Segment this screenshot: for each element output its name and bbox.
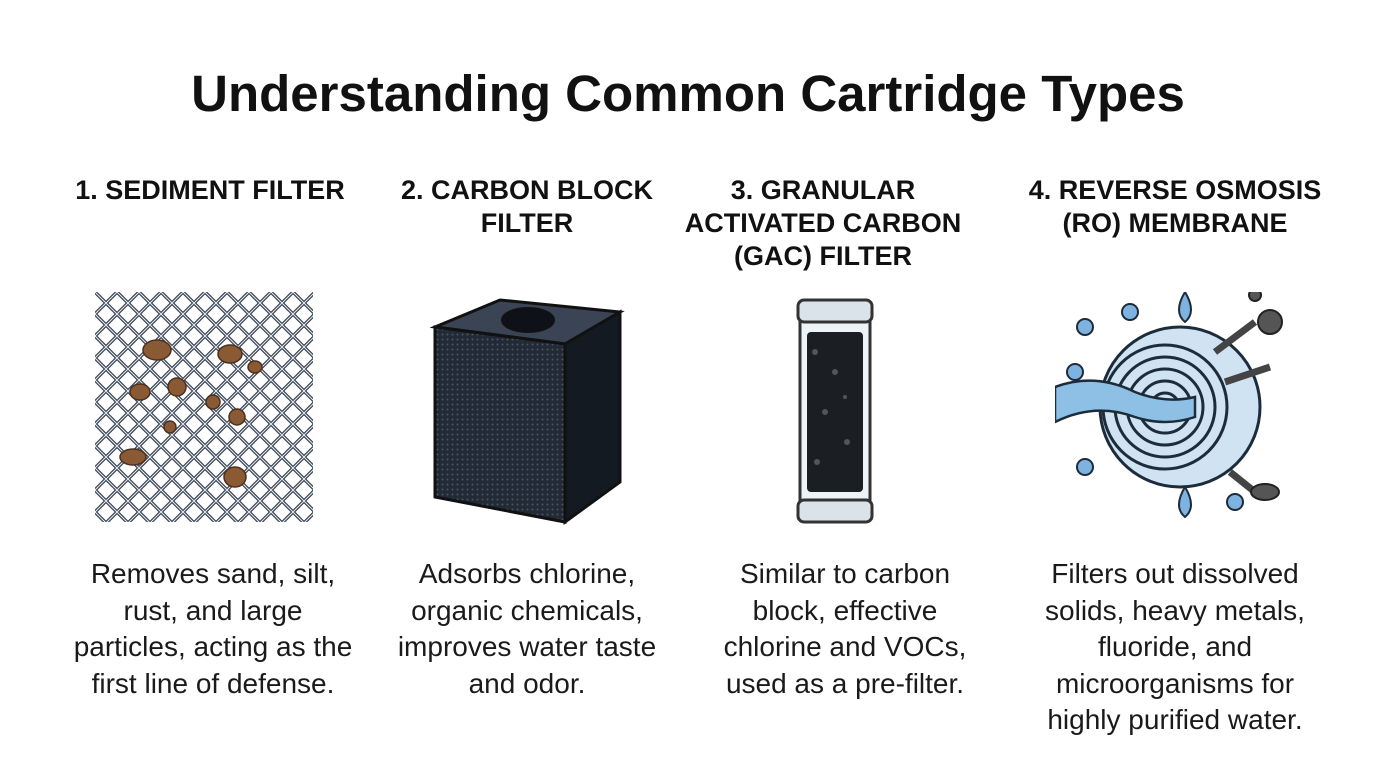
text: carbon block: improves water taste [398, 631, 656, 662]
text: GAC [724, 558, 966, 699]
text: sediment: rust, and large [124, 594, 302, 626]
text: GAC: Similar to carbon [740, 558, 950, 589]
text: GAC: block, effective [753, 594, 937, 626]
icon: sediment mesh [95, 292, 313, 522]
text: RO: fluoride, and [1098, 631, 1252, 662]
text: sediment: particles, acting as the [74, 631, 352, 662]
heading: RO: 4. REVERSE OSMOSIS [1029, 175, 1321, 205]
text: RO [1045, 558, 1305, 735]
heading: GAC: ACTIVATED CARBON [685, 208, 961, 238]
text: RO: Filters out dissolved [1051, 558, 1299, 589]
text: carbon block: Adsorbs chlorine, [419, 558, 635, 589]
heading: GAC [685, 175, 961, 271]
heading: RO: (RO) MEMBRANE [1062, 208, 1287, 238]
text: sediment: first line of defense. [92, 668, 334, 698]
heading: GAC: 3. GRANULAR [731, 175, 915, 205]
text: sediment [74, 558, 352, 698]
text: carbon block [398, 558, 656, 698]
icon: RO membrane [1055, 292, 1283, 518]
text: RO: solids, heavy metals, [1045, 594, 1305, 626]
icon: GAC cartridge [796, 298, 874, 524]
heading: sediment: 1. SEDIMENT FILTER [75, 175, 345, 205]
heading: carbon block [401, 175, 653, 238]
text: carbon block: and odor. [469, 668, 585, 698]
text: GAC: chlorine and VOCs, [724, 631, 966, 662]
heading: GAC: (GAC) FILTER [734, 241, 912, 271]
heading: carbon block: FILTER [481, 208, 573, 238]
heading: RO [1029, 175, 1321, 238]
icon: carbon block [430, 298, 625, 525]
text: RO: microorganisms for [1056, 668, 1294, 698]
text: carbon block: organic chemicals, [411, 594, 643, 626]
text: RO: highly purified water. [1047, 704, 1303, 735]
title: Understanding Common Cartridge Types [191, 65, 1185, 122]
heading: carbon block: 2. CARBON BLOCK [401, 175, 653, 205]
text: sediment: Removes sand, silt, [91, 558, 335, 589]
text: GAC: used as a pre-filter. [726, 668, 964, 698]
